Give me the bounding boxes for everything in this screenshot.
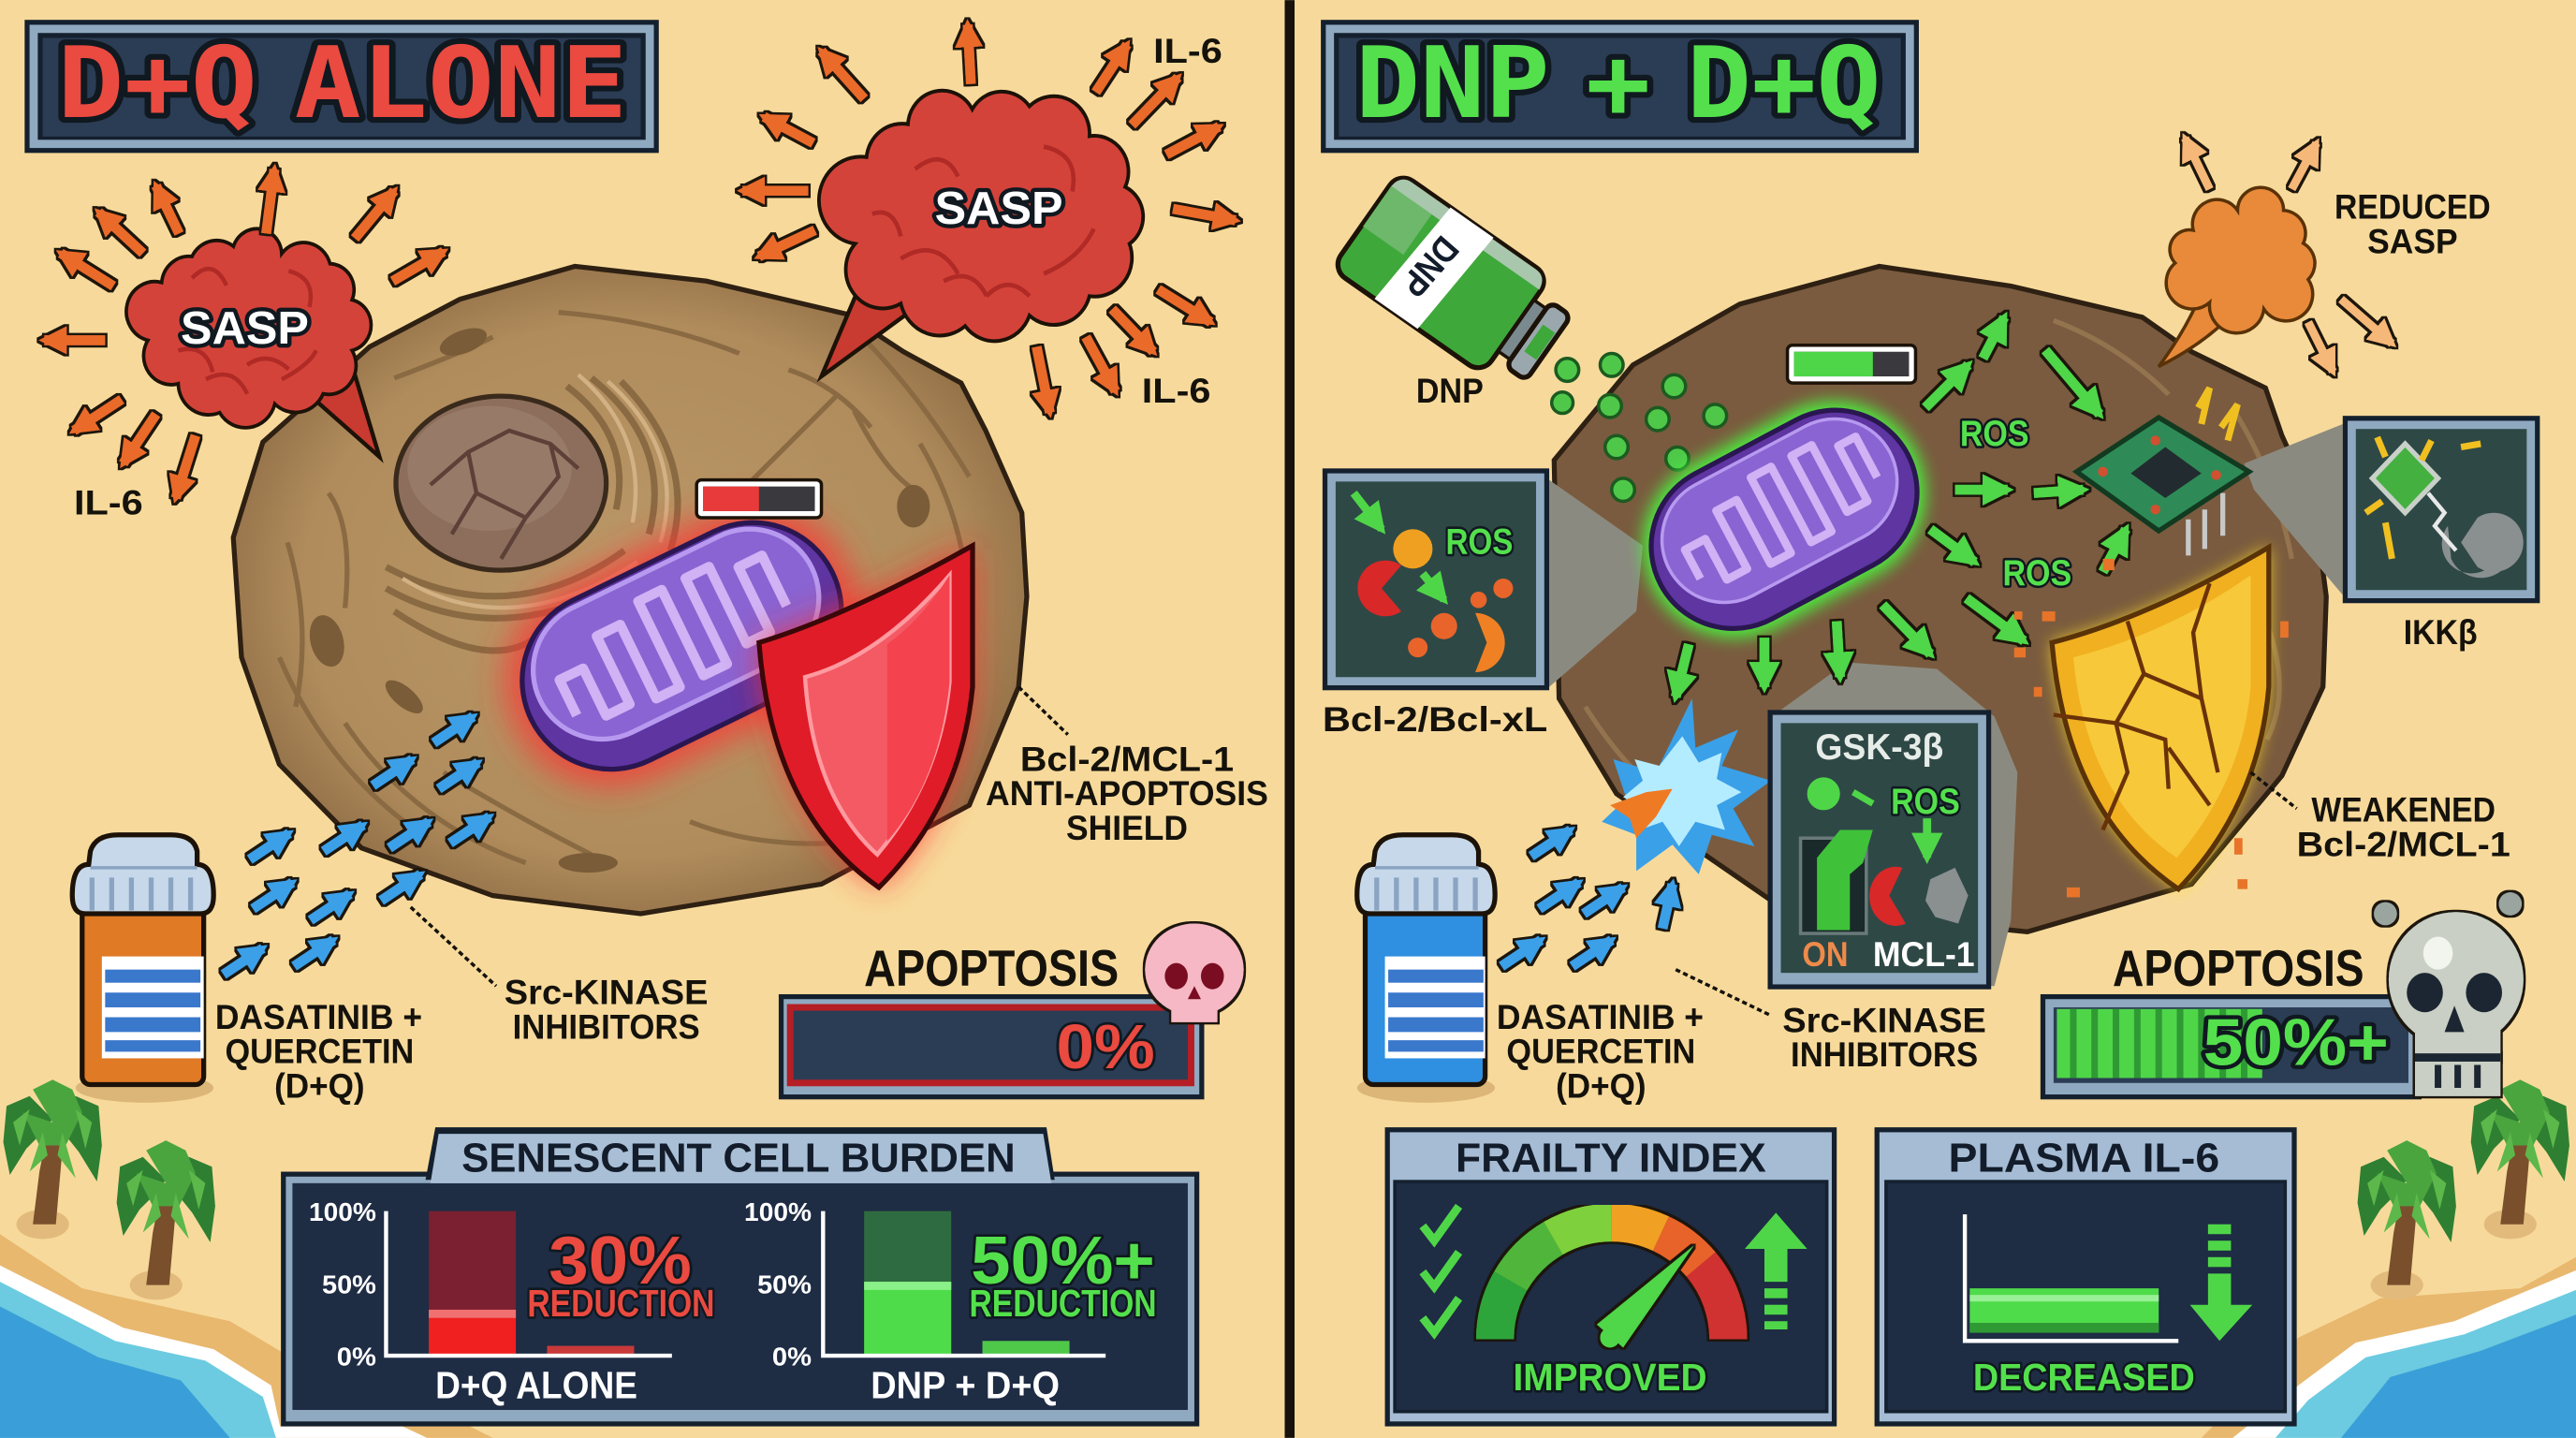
SASP arrows left cloud (44, 169, 444, 498)
Src-kinase label right: INHIBITORS (1791, 1035, 1978, 1074)
callout wedge: GSK-3b (1767, 662, 2017, 986)
yellow shield glow (2052, 548, 2269, 889)
D+Q label left: (D+Q) (274, 1067, 365, 1106)
Bcl-2/Bcl-xL label: Bcl-2/Bcl-xL (1323, 700, 1547, 739)
palm tree (117, 1140, 215, 1299)
DNP bottle: DNP (1393, 228, 1466, 304)
Src-kinase label left (505, 974, 708, 1046)
callout wedge: IKKb (2244, 424, 2343, 594)
reduced SASP cloud (2159, 187, 2315, 367)
panel: plasma IL-6 (1875, 1127, 2297, 1427)
IL-6 label: IL-6 (74, 483, 143, 521)
apoptosis bar 0%: 0% (1057, 1013, 1155, 1082)
title: D+Q alone (24, 20, 659, 153)
right senescent cell (1554, 266, 2326, 932)
panel: senescent cell burden (281, 1127, 1199, 1427)
pill bottle D+Q right (1357, 835, 1495, 1103)
shield label (986, 740, 1268, 847)
blue burst (1602, 698, 1771, 874)
D+Q label right: (D+Q) (1556, 1067, 1647, 1106)
IKKb label: IKKβ (2404, 613, 2478, 652)
grey skull (2374, 892, 2524, 1096)
inset: Bcl-2/Bcl-xL: ROS (1445, 522, 1513, 563)
left SASP cloud small (126, 228, 379, 457)
leader line: kinase inhibitors (411, 907, 496, 986)
palm tree (2358, 1140, 2456, 1299)
right mitochondrion (1622, 381, 1946, 657)
chart: DNP + D+Q: DNP + D+Q (871, 1364, 1060, 1407)
blue inhibitor arrows left (224, 716, 490, 975)
left mitochondrion glow (470, 471, 893, 821)
chart: DNP + D+Q: 50% (757, 1269, 812, 1299)
Src-kinase label right (1782, 1001, 1986, 1074)
right mitochondrion health bar (1788, 345, 1915, 383)
chart: DNP + D+Q (744, 1197, 1157, 1407)
shield label: SHIELD (1066, 809, 1188, 847)
SASP label large: SASP (935, 183, 1063, 234)
down arrow (2190, 1225, 2252, 1341)
shield glow (759, 546, 973, 888)
panel: plasma IL-6: DECREASED (1973, 1356, 2195, 1399)
shield label: ANTI-APOPTOSIS (986, 774, 1268, 813)
ROS label: ROS (1960, 414, 2029, 454)
nucleus (396, 396, 607, 570)
beach left (0, 1234, 493, 1438)
chart: DNP + D+Q: REDUCTION (970, 1282, 1157, 1325)
check marks (1423, 1206, 1459, 1333)
left mitochondrion health bar (696, 480, 822, 518)
SASP arrows right cloud (742, 24, 1236, 413)
apoptosis heading left: APOPTOSIS (864, 940, 1119, 997)
frailty heading: FRAILTY INDEX (1456, 1136, 1766, 1181)
weakened shield (2052, 548, 2269, 889)
reduced SASP arrows (2185, 139, 2392, 372)
title: D+Q alone: D+Q ALONE (57, 25, 627, 140)
D+Q label left (215, 998, 422, 1106)
Src-kinase label right: Src-KINASE (1782, 1001, 1986, 1039)
chart: D+Q alone: 0% (337, 1343, 376, 1372)
gauge needle (1597, 1246, 1694, 1347)
weakened shield label: Bcl-2/MCL-1 (2297, 826, 2510, 864)
DNP droplets (1552, 353, 1727, 501)
plasma heading: PLASMA IL-6 (1949, 1136, 2219, 1181)
DNP bottle (1331, 171, 1582, 397)
anti-apoptosis shield (759, 546, 973, 888)
sparks around shield (2014, 559, 2289, 897)
blue inhibitor arrows right (1501, 829, 1673, 966)
callout wedge: Bcl-2 (1549, 480, 1643, 687)
title: DNP + D+Q: DNP + D+Q (1355, 25, 1881, 140)
reduced SASP label: SASP (2367, 222, 2458, 260)
pink skull (1145, 924, 1244, 1022)
reduced SASP label (2334, 188, 2491, 260)
palm tree (2471, 1079, 2569, 1239)
panel heading: SENESCENT CELL BURDEN (461, 1136, 1016, 1181)
weakened shield label (2297, 791, 2510, 864)
inset: GSK-3b: MCL-1 (1873, 935, 1975, 974)
inset: GSK-3b: ON (1802, 935, 1848, 974)
inset: IKKb (2343, 416, 2539, 603)
right mitochondrion glow (1610, 369, 1958, 670)
chart: DNP + D+Q: 50%+ (971, 1224, 1155, 1299)
up arrow (1745, 1212, 1808, 1329)
left SASP cloud large (819, 91, 1143, 376)
IL-6 label: IL-6 (1153, 32, 1222, 70)
leader line: kinase inhibitors right (1676, 970, 1771, 1016)
weakened shield label: WEAKENED (2311, 791, 2496, 829)
reduced SASP label: REDUCED (2334, 188, 2491, 227)
chart: D+Q alone: 30% (549, 1224, 692, 1299)
inset: Bcl-2/Bcl-xL (1323, 468, 1549, 690)
IL-6 label: IL-6 (1142, 372, 1211, 410)
shield label: Bcl-2/MCL-1 (1020, 740, 1234, 778)
Src-kinase label left: Src-KINASE (505, 974, 708, 1012)
Src-kinase label left: INHIBITORS (513, 1007, 700, 1046)
inset: GSK-3b: GSK-3β (1815, 727, 1943, 768)
D+Q label right: QUERCETIN (1506, 1033, 1695, 1071)
chart: D+Q alone: 100% (309, 1197, 376, 1226)
inset: GSK-3b (1767, 710, 1991, 990)
chart: D+Q alone (309, 1197, 714, 1407)
divider between panels (1284, 0, 1295, 1438)
apoptosis heading right: APOPTOSIS (2113, 940, 2364, 997)
chart: DNP + D+Q: 100% (744, 1197, 812, 1226)
panel: frailty index: IMPROVED (1513, 1356, 1707, 1399)
apoptosis bar 50%: 50%+ (2203, 1005, 2389, 1078)
D+Q label left: DASATINIB + (215, 998, 422, 1036)
chart: D+Q alone: REDUCTION (527, 1282, 714, 1325)
leader line: weakened shield (2250, 772, 2297, 809)
left mitochondrion (492, 492, 871, 800)
gauge (1495, 1223, 1728, 1340)
inset: GSK-3b: ROS (1891, 782, 1960, 822)
D+Q label right: DASATINIB + (1497, 998, 1704, 1036)
il-6 bar chart (1965, 1214, 2178, 1341)
chart: DNP + D+Q: 0% (772, 1343, 812, 1372)
leader line: shield (1018, 687, 1068, 735)
chart: D+Q alone: D+Q ALONE (435, 1364, 637, 1407)
apoptosis bar 0% (779, 994, 1204, 1099)
circuit chip IKK (2076, 388, 2249, 555)
pill bottle D+Q left (72, 835, 213, 1103)
D+Q label left: QUERCETIN (225, 1033, 414, 1071)
DNP label: DNP (1416, 372, 1484, 410)
ROS label: ROS (2002, 553, 2071, 594)
D+Q label right (1497, 998, 1704, 1106)
chart: D+Q alone: 50% (322, 1269, 376, 1299)
title: DNP + D+Q (1321, 20, 1919, 153)
apoptosis bar 50% (2041, 994, 2422, 1099)
ROS arrows (1676, 317, 2126, 697)
panel: frailty index (1385, 1127, 1837, 1427)
beach right (2202, 1257, 2576, 1438)
palm tree (4, 1079, 102, 1239)
left senescent cell (233, 266, 1027, 914)
SASP label small: SASP (181, 303, 309, 354)
